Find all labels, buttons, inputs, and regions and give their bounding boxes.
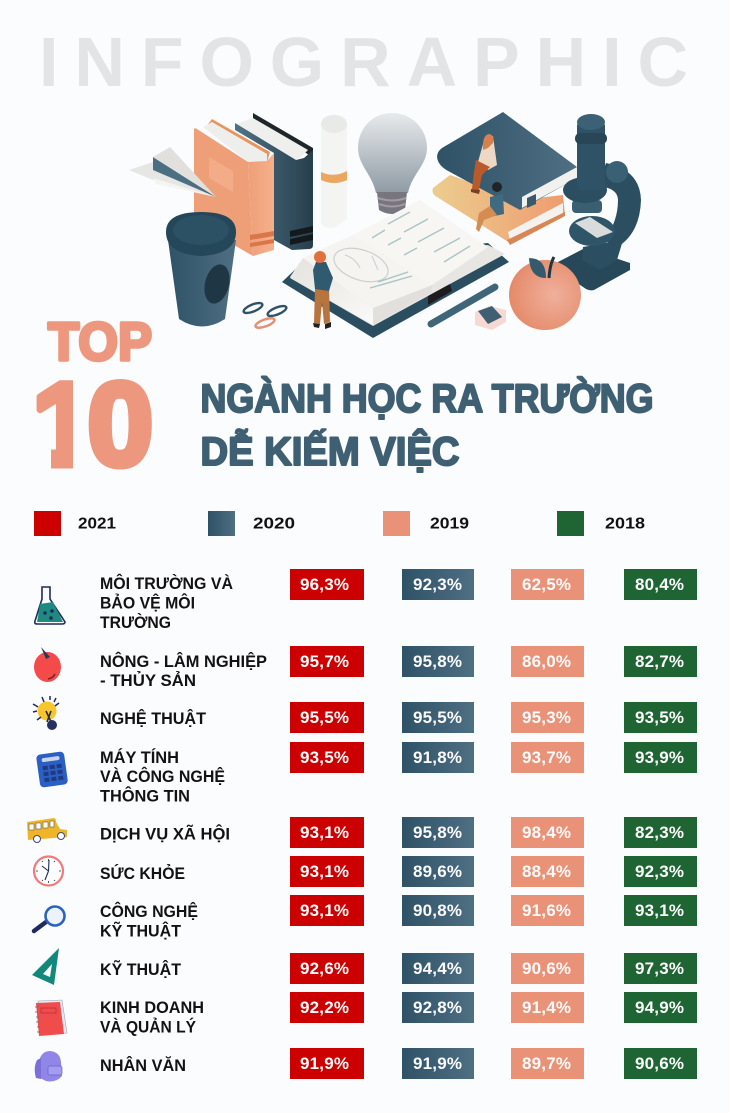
row: Môi trường: 80,4% [635, 575, 684, 594]
row: Dịch vụ xã hội: 82,3% [635, 823, 684, 842]
label [100, 652, 267, 690]
label: DỊCH VỤ XÃ HỘI [100, 824, 230, 844]
icon: pen [431, 287, 495, 324]
row: Dịch vụ xã hội [27, 817, 697, 848]
row: Kinh doanh: 92,8% [413, 998, 462, 1017]
row: Nghệ thuật: 95,5% [413, 708, 462, 727]
row: Công nghệ kỹ thuật [34, 895, 697, 940]
icon: woman figure [313, 251, 333, 329]
row: Nhân văn: 91,9% [413, 1054, 462, 1073]
icon: dark book [235, 113, 313, 250]
label [100, 998, 204, 1036]
row: Máy tính: 91,8% [413, 748, 462, 767]
label: THÔNG TIN [100, 786, 190, 806]
label: MÔI TRƯỜNG VÀ [100, 574, 233, 593]
icon: light bulb [358, 113, 427, 214]
heading: 10: 1 [32, 359, 98, 491]
row: Máy tính: 93,5% [300, 748, 349, 767]
row: Máy tính: 93,7% [522, 748, 571, 767]
icon: clock [34, 856, 63, 886]
row: Kinh doanh: 94,9% [635, 998, 684, 1017]
row: Nông lâm: 95,7% [300, 652, 349, 671]
icon: paper scroll [321, 115, 347, 228]
icon: paper clips [242, 301, 288, 330]
row: Kỹ thuật: 90,6% [522, 959, 571, 978]
title: INFOGRAPHIC: INFOGRAPHIC [39, 23, 688, 101]
label: KINH DOANH [100, 998, 204, 1017]
heading: TOP: TOP [48, 312, 152, 372]
heading: 10 [36, 379, 152, 470]
label: KỸ THUẬT [100, 959, 182, 979]
label: VÀ QUẢN LÝ [100, 1018, 197, 1036]
illustration: study objects [129, 112, 641, 338]
icon: backpack [35, 1051, 62, 1081]
icon: school bus [27, 818, 67, 842]
icon: apple [509, 257, 581, 330]
label: KỸ THUẬT [100, 920, 182, 940]
icon: notebook [35, 1000, 67, 1036]
row: Kỹ thuật [32, 948, 697, 985]
row: Công nghệ kỹ thuật: 90,8% [413, 901, 462, 920]
row: Nông lâm: 95,8% [413, 652, 462, 671]
row: Dịch vụ xã hội: 95,8% [413, 823, 462, 842]
row: Kỹ thuật: 94,4% [413, 959, 462, 978]
icon: calculator [36, 751, 68, 788]
icon: magnifier [34, 906, 64, 931]
legend: 2018 [605, 516, 645, 532]
row: Sức khỏe: 88,4% [522, 862, 571, 881]
row: Nhân văn [35, 1048, 697, 1081]
row: Kinh doanh [35, 992, 697, 1036]
icon: set square [32, 948, 59, 985]
row: Nghệ thuật: 95,3% [522, 708, 571, 727]
label: MÁY TÍNH [100, 748, 179, 767]
row: Sức khỏe [34, 856, 697, 887]
row: Môi trường: 92,3% [413, 575, 462, 594]
row: Công nghệ kỹ thuật: 93,1% [635, 901, 684, 920]
row: Nhân văn: 90,6% [635, 1054, 684, 1073]
row: Nông lâm [34, 646, 697, 690]
row: Sức khỏe: 89,6% [413, 862, 462, 881]
label: NGHỆ THUẬT [100, 709, 207, 728]
legend [34, 511, 645, 536]
label: CÔNG NGHỆ [100, 902, 198, 921]
row: Sức khỏe: 92,3% [635, 862, 684, 881]
icon: orange book [194, 119, 274, 256]
row: Máy tính [36, 742, 697, 806]
row: Nghệ thuật: 95,5% [300, 708, 349, 727]
icon: flask [35, 587, 65, 624]
label: NÔNG - LÂM NGHIỆP [100, 652, 267, 671]
row: Kỹ thuật: 97,3% [635, 959, 684, 978]
icon: stacked books with people [432, 112, 577, 245]
label [100, 902, 198, 940]
row: Sức khỏe: 93,1% [300, 862, 349, 881]
row: Kỹ thuật: 92,6% [300, 959, 349, 978]
row: Nhân văn: 91,9% [300, 1054, 349, 1073]
heading: NGÀNH HỌC RA TRƯỜNG: NGÀNH HỌC RA TRƯỜNG [200, 375, 654, 421]
label [100, 574, 233, 632]
row: Công nghệ kỹ thuật: 93,1% [300, 901, 349, 920]
row: Nghệ thuật: 93,5% [635, 708, 684, 727]
row: Nông lâm: 86,0% [522, 652, 571, 671]
icon: coffee cup [166, 212, 236, 326]
row: Kinh doanh: 91,4% [522, 998, 571, 1017]
row: Công nghệ kỹ thuật: 91,6% [522, 901, 571, 920]
heading: 10: 0 [88, 359, 153, 491]
row: Môi trường: 96,3% [300, 575, 349, 594]
icon: apple [34, 647, 61, 682]
row: Kinh doanh: 92,2% [300, 998, 349, 1017]
icon: light bulb [33, 696, 59, 730]
legend: 2021 [78, 516, 116, 532]
icon: paper plane [129, 147, 216, 197]
heading: DỄ KIẾM VIỆC: DỄ KIẾM VIỆC [200, 428, 460, 474]
legend: 2020 [253, 516, 295, 532]
row: Máy tính: 93,9% [635, 748, 684, 767]
label: SỨC KHỎE [100, 864, 185, 883]
row: Môi trường [35, 569, 697, 632]
row: Nghệ thuật [33, 696, 697, 733]
row: Nông lâm: 82,7% [635, 652, 684, 671]
label [100, 748, 225, 806]
label: - THỦY SẢN [100, 671, 196, 690]
legend: 2019 [430, 516, 469, 532]
icon: open book [282, 200, 509, 338]
label: VÀ CÔNG NGHỆ [100, 767, 225, 786]
label: NHÂN VĂN [100, 1056, 186, 1075]
label: BẢO VỆ MÔI [100, 594, 195, 612]
row: Môi trường: 62,5% [522, 575, 571, 594]
row: Dịch vụ xã hội: 93,1% [300, 823, 349, 842]
icon: microscope [558, 114, 641, 290]
row: Nhân văn: 89,7% [522, 1054, 571, 1073]
icon: eraser [475, 306, 506, 330]
label: TRƯỜNG [100, 613, 171, 632]
row: Dịch vụ xã hội: 98,4% [522, 823, 571, 842]
